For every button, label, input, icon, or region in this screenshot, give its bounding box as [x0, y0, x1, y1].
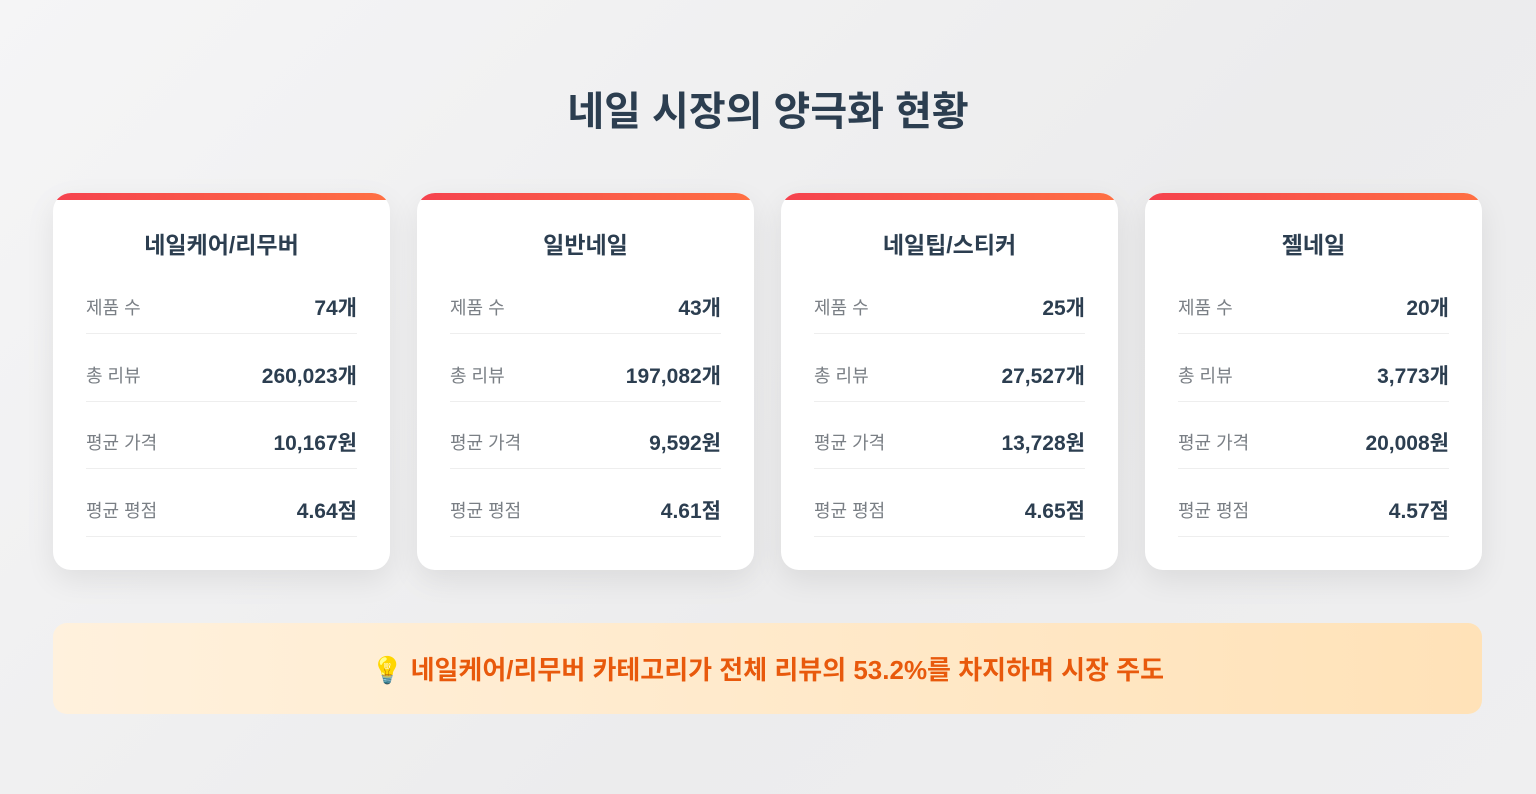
row: 평균 평점: 4.61점 [661, 500, 721, 522]
row: 제품 수: 제품 수 [86, 298, 141, 318]
row: 평균 평점: 평균 평점 [814, 500, 885, 520]
panel: 네일팁/스티커 [781, 193, 1118, 570]
row: 평균 평점: 평균 평점 [450, 500, 521, 520]
row: 평균 가격: 20,008원 [1365, 432, 1449, 454]
card heading: 네일팁/스티커 [883, 232, 1016, 258]
row: 제품 수: 제품 수 [1178, 298, 1233, 318]
panel: 일반네일 [417, 193, 754, 570]
row: 총 리뷰: 총 리뷰 [86, 366, 141, 386]
row: 총 리뷰: 27,527개 [1001, 364, 1085, 388]
row: 총 리뷰: 260,023개 [262, 364, 357, 388]
row: 평균 평점 [814, 483, 1085, 537]
row: 제품 수 [814, 280, 1085, 334]
row: 평균 평점 [1178, 483, 1449, 537]
row: 평균 가격: 10,167원 [273, 432, 357, 454]
card heading: 젤네일 [1282, 232, 1345, 258]
row: 평균 가격 [814, 415, 1085, 469]
row: 평균 평점: 4.64점 [297, 500, 357, 522]
row: 총 리뷰: 3,773개 [1377, 364, 1449, 388]
row: 평균 평점: 4.65점 [1025, 500, 1085, 522]
row: 평균 가격 [1178, 415, 1449, 469]
row: 총 리뷰 [86, 348, 357, 402]
row: 총 리뷰: 총 리뷰 [1178, 366, 1233, 386]
row: 평균 가격: 13,728원 [1001, 432, 1085, 454]
row: 제품 수 [86, 280, 357, 334]
row: 총 리뷰 [450, 348, 721, 402]
row: 제품 수: 제품 수 [814, 298, 869, 318]
row: 평균 평점 [450, 483, 721, 537]
card heading: 일반네일 [543, 232, 628, 258]
row: 평균 평점 [86, 483, 357, 537]
row: 총 리뷰: 총 리뷰 [450, 366, 505, 386]
row: 총 리뷰: 197,082개 [626, 364, 721, 388]
title: 네일 시장의 양극화 현황 [567, 90, 969, 134]
row: 총 리뷰 [814, 348, 1085, 402]
row: 평균 가격: 평균 가격 [450, 432, 521, 452]
row: 평균 가격 [86, 415, 357, 469]
row: 제품 수: 25개 [1042, 296, 1085, 320]
row: 평균 가격: 평균 가격 [86, 432, 157, 452]
card heading: 네일케어/리무버 [144, 232, 299, 258]
row: 평균 가격: 평균 가격 [1178, 432, 1249, 452]
row: 평균 평점: 4.57점 [1389, 500, 1449, 522]
row: 제품 수: 43개 [678, 296, 721, 320]
row: 제품 수 [450, 280, 721, 334]
callout banner: 💡 네일케어/리무버 카테고리가 전체 리뷰의 53.2%를 차지하며 시장 주도 [371, 655, 1164, 685]
callout banner [53, 623, 1482, 714]
row: 평균 평점: 평균 평점 [1178, 500, 1249, 520]
row: 제품 수 [1178, 280, 1449, 334]
row: 제품 수: 제품 수 [450, 298, 505, 318]
row: 평균 가격: 9,592원 [649, 432, 721, 454]
panel: 젤네일 [1145, 193, 1482, 570]
row: 평균 가격 [450, 415, 721, 469]
row: 총 리뷰 [1178, 348, 1449, 402]
row: 평균 평점: 평균 평점 [86, 500, 157, 520]
row: 제품 수: 20개 [1406, 296, 1449, 320]
row: 제품 수: 74개 [314, 296, 357, 320]
row: 총 리뷰: 총 리뷰 [814, 366, 869, 386]
row: 평균 가격: 평균 가격 [814, 432, 885, 452]
panel: 네일케어/리무버 [53, 193, 390, 570]
